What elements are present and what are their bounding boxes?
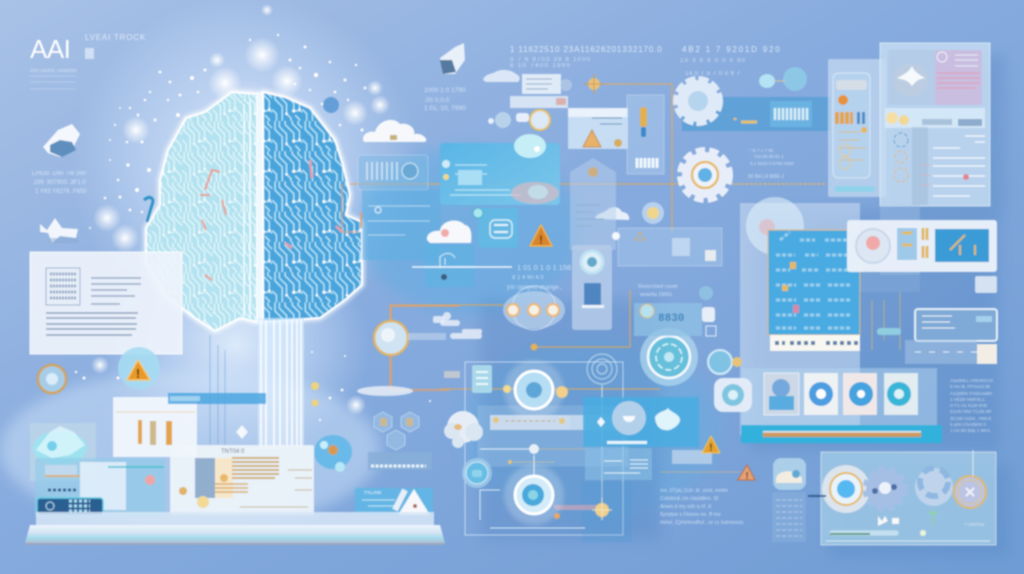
middle text: 1 01 0 1 0 1 156 xyxy=(517,263,571,272)
document panel xyxy=(30,252,182,354)
right text block: 3C1W H104.. H00 8 xyxy=(950,416,992,421)
right text block xyxy=(950,378,993,433)
white cloud wisps xyxy=(357,312,482,396)
centre bottom panel: TNT04 0 xyxy=(221,449,245,455)
gear note text: .. 710.09 80 81 1 xyxy=(750,154,784,159)
card 4 xyxy=(884,373,918,415)
top header data text xyxy=(510,45,780,77)
top header data text: 3 7 6 9703 39 8 1000 xyxy=(510,57,591,63)
right text block: D1V0 Hh0 TC2B 0R xyxy=(950,409,992,414)
circuit outline panel xyxy=(444,362,632,542)
concentric signal ring xyxy=(587,354,617,510)
warning triangle centre xyxy=(530,225,552,247)
blue blob and hex cluster xyxy=(314,412,432,472)
warning with blue blob: ! xyxy=(136,366,140,381)
middle text xyxy=(507,263,713,300)
lower centre text block: rhHvl, (QrhHnvdhvl ..or cc kstmeeos xyxy=(660,520,744,526)
small ring and square icon xyxy=(706,326,752,412)
lower centre text block: Cvbdor& cm clastdlen. Sf xyxy=(660,496,719,502)
lower centre text block: Anwn.d my ssh q nf .d xyxy=(660,504,711,510)
middle text: [00 Spayed change., xyxy=(507,285,562,291)
white overlay panel xyxy=(847,220,997,272)
small clouds xyxy=(483,70,629,220)
white bars panels xyxy=(510,74,568,108)
dashboard panel xyxy=(35,458,165,518)
gear note text: " 70 7 1 7 90 xyxy=(748,148,774,153)
gear note text xyxy=(732,148,826,184)
horizontal bar with nodes xyxy=(490,415,620,430)
top header data text: 10 3 9 9 0 0 0 90 xyxy=(680,58,746,64)
white cloud pink dot xyxy=(427,220,471,243)
cyan base bar xyxy=(741,425,942,443)
warning lower xyxy=(672,436,720,464)
card row xyxy=(742,368,937,426)
warning far right: ! xyxy=(745,471,749,482)
card 3 xyxy=(843,373,877,415)
cloud sphere with pink cloud xyxy=(511,134,559,204)
glow field behind brain xyxy=(0,0,720,530)
warning lower: ! xyxy=(709,442,713,454)
glowing ring upper xyxy=(503,360,568,420)
white device xyxy=(572,245,612,330)
lower blue panel by brain xyxy=(360,190,440,260)
mid text snippets xyxy=(424,87,466,112)
mid text snippets: 1 01, 10, 7990 xyxy=(424,105,466,112)
gold rings and star xyxy=(530,74,604,130)
blue tile xyxy=(412,245,512,287)
round lens top xyxy=(746,197,804,255)
small squares right xyxy=(877,276,997,364)
right text block: H F1 A1 K1M 0H0 xyxy=(950,403,987,408)
title block: AAI xyxy=(30,34,70,64)
right text block: 5 p00 ChH0bh0 0 xyxy=(950,422,986,427)
gold blob xyxy=(642,202,664,224)
left caption text xyxy=(32,171,87,195)
gold connector lines xyxy=(342,84,692,390)
brain glow xyxy=(146,92,362,331)
lower centre text block: flymdon s Fkmov ee .ff me xyxy=(660,512,721,518)
top header data text: 1 11622510 23A11626201332170.0 xyxy=(510,45,662,54)
right text block: J U4 B0 Bdy 1 MH1 xyxy=(950,428,991,433)
gold cloud xyxy=(444,411,483,448)
warning far right xyxy=(738,465,755,482)
particles around brain xyxy=(75,4,431,421)
house panel xyxy=(570,158,616,250)
right text block: 0 Ho 0L FFHo1d 90 xyxy=(950,384,991,389)
card 2 xyxy=(804,373,838,415)
card 1 xyxy=(764,373,799,415)
big dashboard panel xyxy=(880,43,990,206)
middle text: 8 1 4 90 4 0 xyxy=(512,275,544,281)
warning with blue blob xyxy=(118,347,160,389)
cloud gear on blue strip xyxy=(676,79,830,131)
mid text snippets: 1000 1 0 1790 xyxy=(424,87,466,94)
left caption text: 1 Y63 Y6276 .F850 xyxy=(35,189,87,195)
title block: GRI LNGRS, HOMIDEL xyxy=(30,68,78,73)
left caption text: .199 .907903 .3F1.0 xyxy=(32,180,86,186)
title block: LVEAI TROCK xyxy=(85,33,146,42)
blue label bar xyxy=(168,393,266,404)
title block xyxy=(30,33,146,89)
lower centre text block xyxy=(660,488,744,526)
platform xyxy=(25,512,445,545)
left caption text: LP639 .D90 7W 390 xyxy=(32,171,87,177)
gear panel: • VIMTAN xyxy=(965,522,984,527)
background tablet xyxy=(740,203,920,435)
circle pair top right xyxy=(759,67,807,91)
big cyan ring xyxy=(640,328,698,386)
middle text: wowrtia 1960s xyxy=(640,292,672,298)
small circle lower left xyxy=(462,458,555,488)
warning triangle centre: ! xyxy=(539,233,543,247)
phone panel xyxy=(828,59,886,197)
crystal tile xyxy=(30,423,96,481)
lower centre text block: ms .0Tyiu.1Un .kl .snxL mmhr xyxy=(660,488,728,494)
blue feature panel xyxy=(583,397,699,447)
tall pale panel xyxy=(627,95,664,174)
icon: cube top left xyxy=(43,124,80,157)
gold cross node xyxy=(554,498,612,520)
mid text snippets: .00 0.0.0 xyxy=(424,97,450,104)
pale panel with warning xyxy=(568,108,628,149)
brain xyxy=(140,88,364,333)
large gear xyxy=(681,151,729,199)
cyan tile xyxy=(473,208,518,248)
right hemisphere xyxy=(262,88,364,328)
middle text: Revorchied coviel xyxy=(638,284,677,290)
cyan icon screen xyxy=(768,230,860,351)
chart text strip xyxy=(530,448,740,480)
gear panel xyxy=(808,450,996,545)
wide outline panel xyxy=(612,228,722,266)
icon: cube upper middle xyxy=(440,43,465,74)
top header data text: 6 10 7400 1990 xyxy=(510,63,571,69)
digit display panel: 8830 xyxy=(658,313,684,325)
rounded icon and list xyxy=(772,458,806,542)
chart panel with bars xyxy=(113,397,197,457)
stem traces xyxy=(210,318,304,448)
right text block: 1 H0Z8 HWF0L1. xyxy=(950,397,986,402)
small bar node xyxy=(480,444,539,475)
blue panel with triangle: TYLANK xyxy=(364,490,382,495)
triple ring xyxy=(503,286,565,350)
gear note text: 0.1 8103 0 0700 0300 xyxy=(750,161,794,166)
left hemisphere xyxy=(140,88,260,333)
cloud near brain xyxy=(363,120,426,142)
right text block: A1Q8RK FHd1owB0 xyxy=(950,391,993,396)
gold nodes on stem xyxy=(236,382,319,439)
soft panel shadows xyxy=(480,55,1010,557)
left gold lens xyxy=(374,306,460,390)
blue panel with triangle xyxy=(355,488,433,515)
right text block: Asu0MLL H004KD10 xyxy=(950,378,993,383)
gold ring xyxy=(38,365,66,393)
gear note text: 00 B4 L4 W80 J xyxy=(748,174,784,180)
centre bottom panel xyxy=(170,445,314,515)
top header data text: 14.0 7.5 7 0 0 9 7 xyxy=(685,71,741,77)
glowing ring lower xyxy=(504,465,564,525)
top header data text: 4B2 1 7 9201D 920 xyxy=(682,45,780,54)
digit display panel xyxy=(634,303,715,336)
cyan panel xyxy=(440,143,560,205)
icon: small folded shape xyxy=(40,218,78,243)
left data panel by brain xyxy=(358,155,428,190)
